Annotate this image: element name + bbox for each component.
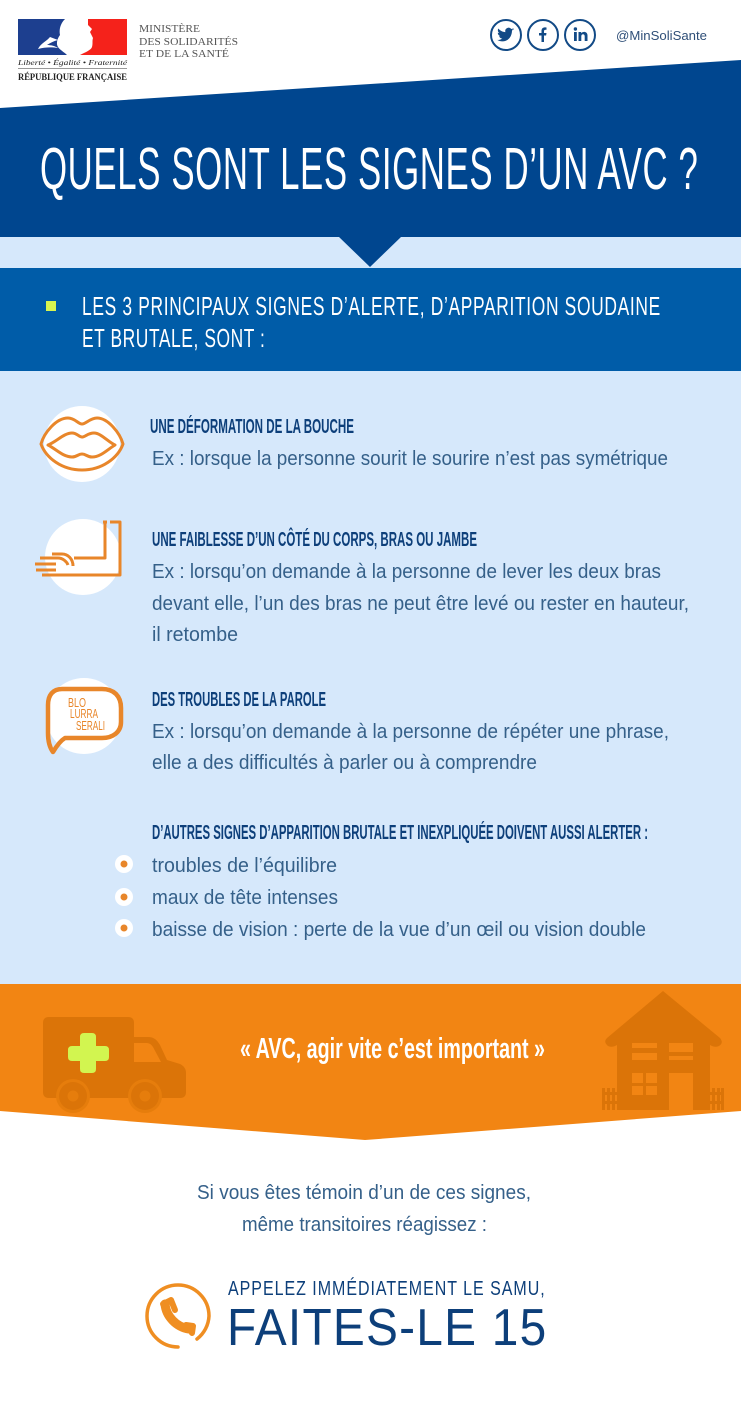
call to action: APPELEZ IMMÉDIATEMENT LE SAMU, — [228, 1276, 545, 1299]
icon: arm — [35, 519, 121, 595]
icon: house — [602, 991, 724, 1111]
social handle: @MinSoliSante — [616, 28, 707, 43]
sign 2 text: il retombe — [152, 623, 238, 646]
bullet 3 — [115, 919, 133, 937]
bullet 2 — [115, 888, 133, 906]
sign 1 text — [150, 415, 668, 470]
bubble text: LURRA — [70, 706, 98, 721]
item 1: troubles de l’équilibre — [152, 854, 337, 877]
sign 2 text: Ex : lorsqu’on demande à la personne de lever les deux bras — [152, 560, 661, 583]
heading text — [82, 292, 660, 353]
panel: light blue content background — [0, 237, 741, 984]
ministry name: ET DE LA SANTÉ — [139, 48, 229, 60]
witness message: Si vous êtes témoin d’un de ces signes, — [197, 1182, 531, 1204]
ministry name: MINISTÈRE — [139, 23, 200, 35]
icon: phone — [147, 1285, 209, 1347]
heading text: ET BRUTALE, SONT : — [82, 324, 265, 353]
bubble text: BLO — [68, 695, 86, 710]
sign 3 text: elle a des difficultés à parler ou à comprendre — [152, 751, 537, 774]
logo: République Française — [17, 19, 128, 82]
slogan: « AVC, agir vite c’est important » — [240, 1033, 545, 1065]
logo: République Française: RÉPUBLIQUE FRANÇAISE — [18, 72, 127, 82]
title: QUELS SONT LES SIGNES D’UN AVC ? — [40, 137, 698, 202]
panel: orange banner — [0, 984, 741, 1140]
bubble text: SERALI — [76, 718, 105, 733]
sign 2 text: UNE FAIBLESSE D’UN CÔTÉ DU CORPS, BRAS OU JAMBE — [152, 527, 477, 551]
ministry name — [139, 23, 238, 60]
witness message — [197, 1182, 531, 1236]
bubble text — [68, 695, 105, 733]
other signs list — [115, 854, 646, 941]
bullet 1 — [115, 855, 133, 873]
icon: speech bubble — [46, 678, 122, 754]
item 2: maux de tête intenses — [152, 886, 338, 909]
icon: ambulance — [43, 1017, 186, 1113]
icon: linkedin — [565, 20, 595, 50]
ministry name: DES SOLIDARITÉS — [139, 36, 238, 48]
sign 3 text: Ex : lorsqu’on demande à la personne de répéter une phrase, — [152, 720, 669, 743]
sign 2 text — [152, 527, 689, 646]
panel: main alert heading band — [0, 268, 741, 371]
icon: twitter — [491, 20, 521, 50]
heading text: LES 3 PRINCIPAUX SIGNES D’ALERTE, D’APPARITION SOUDAINE — [82, 292, 660, 321]
emergency number: FAITES-LE 15 — [227, 1298, 546, 1356]
sign 1 text: Ex : lorsque la personne sourit le sourire n’est pas symétrique — [152, 447, 668, 470]
icon: medical cross — [68, 1033, 109, 1073]
bullet: lime square — [46, 301, 56, 311]
icon: lips — [41, 406, 123, 482]
sign 3 text: DES TROUBLES DE LA PAROLE — [152, 688, 326, 711]
sign 1 text: UNE DÉFORMATION DE LA BOUCHE — [150, 415, 354, 438]
title banner — [0, 60, 741, 237]
icon: facebook — [528, 20, 558, 50]
banner pointer arrow — [339, 237, 401, 267]
call to action — [227, 1276, 546, 1356]
witness message: même transitoires réagissez : — [242, 1214, 487, 1236]
item 3: baisse de vision : perte de la vue d’un œil ou vision double — [152, 918, 646, 941]
sign 2 text: devant elle, l’un des bras ne peut être levé ou rester en hauteur, — [152, 592, 689, 615]
sign 3 text — [152, 688, 669, 774]
logo: République Française: Liberté • Égalité • Fraternité — [17, 57, 128, 67]
